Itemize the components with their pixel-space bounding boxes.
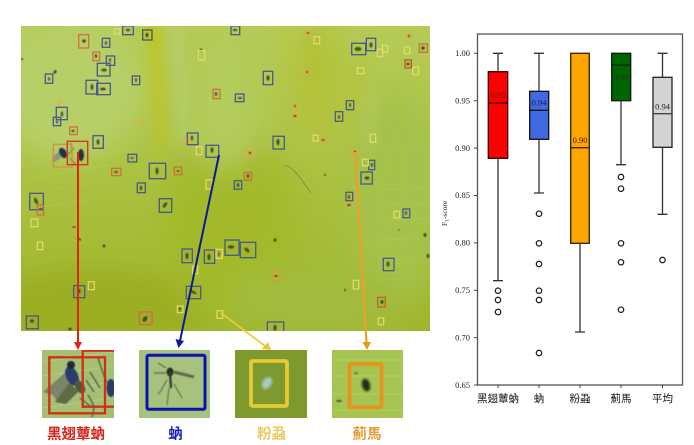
x axis category labels: 蚋	[534, 393, 544, 405]
box: midge: 0.94	[532, 98, 547, 108]
y axis title: 1	[444, 219, 450, 222]
y axis tick labels: 0.75	[455, 285, 470, 295]
y axis tick labels	[455, 48, 470, 390]
x axis category labels: 黑翅蕈蚋	[477, 392, 519, 405]
x axis category labels	[477, 392, 673, 405]
y axis tick labels: 0.90	[455, 143, 470, 153]
x axis category labels: 平均	[652, 393, 673, 405]
thumbnail: black-winged fungus gnat	[42, 350, 114, 418]
yellow detection boxes: whiteflies	[31, 29, 419, 325]
box: midge	[530, 53, 549, 356]
box: average: 0.94	[655, 102, 671, 112]
x axis category labels: 薊馬	[610, 392, 632, 405]
y axis tick labels: 0.85	[455, 190, 470, 200]
glow around thrips	[56, 29, 413, 280]
chart frame and axes	[474, 34, 682, 388]
y axis tick labels: 0.65	[455, 380, 470, 390]
label: whitefly: 粉蝨	[257, 425, 286, 443]
y axis tick labels: 0.80	[455, 238, 470, 248]
large flies	[50, 143, 84, 165]
box: black-winged fungus gnat: 0.95	[491, 90, 505, 100]
box: whitefly	[571, 53, 589, 332]
thumbnail: midge	[139, 350, 210, 418]
photo background	[21, 26, 430, 331]
box: whitefly: 0.90	[573, 135, 587, 145]
panel: trap photo with detection boxes	[21, 26, 430, 331]
y axis tick labels: 1.00	[455, 48, 470, 58]
y axis title: F	[440, 222, 449, 226]
arrow: fungus gnat callout	[74, 152, 82, 350]
thin curved mark	[284, 165, 311, 193]
orange detection boxes: thrips	[37, 35, 427, 325]
label: thrips: 薊馬	[352, 426, 382, 443]
y axis tick labels: 0.70	[455, 332, 470, 342]
thumbnail: whitefly	[235, 350, 307, 418]
arrow: thrips callout	[355, 152, 371, 350]
blue detection boxes: midges	[26, 26, 410, 332]
box plot chart	[440, 34, 682, 405]
insects	[20, 29, 430, 331]
y axis title: -score	[440, 200, 449, 219]
box: average	[653, 53, 672, 263]
arrow: whitefly callout	[221, 313, 271, 350]
label: fungus gnat: 黑翅蕈蚋	[47, 425, 105, 443]
label: midge: 蚋	[168, 426, 183, 443]
arrow: midge callout	[176, 155, 219, 348]
x axis category labels: 粉蝨	[570, 393, 591, 405]
thumbnail: thrips	[332, 350, 403, 418]
box: thrips	[612, 53, 631, 312]
box: black-winged fungus gnat	[488, 53, 508, 315]
y axis tick labels: 0.95	[455, 96, 470, 106]
box: thrips: 0.99	[614, 72, 628, 82]
red detection box: black-winged fungus gnat	[67, 141, 88, 165]
